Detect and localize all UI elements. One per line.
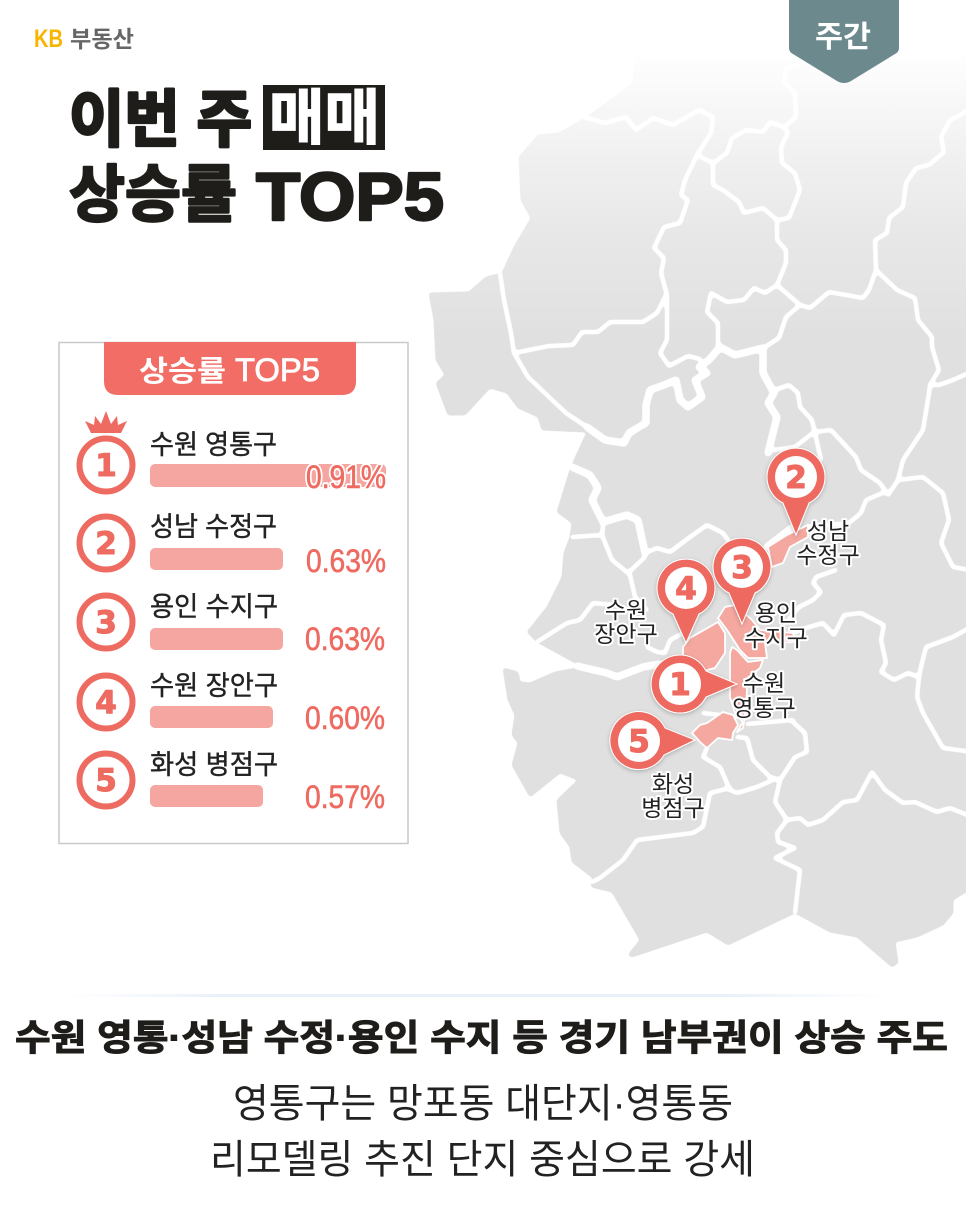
map label: 수원 영통구: [732, 670, 796, 721]
row 1: 0.91%: [306, 459, 386, 495]
tag: 주간: [789, 0, 899, 83]
map label: 화성 병점구: 화성: [652, 771, 694, 797]
row 2: 성남 수정구: [150, 512, 277, 542]
map label: 용인 수지구: 수지구: [744, 625, 808, 651]
map label: 성남 수정구: 수정구: [796, 542, 860, 568]
title: TOP5: [256, 159, 444, 235]
map label: 성남 수정구: [796, 518, 860, 568]
map label: 화성 병점구: 병점구: [641, 795, 705, 821]
headline: 수원 영통·성남 수정·용인 수지 등 경기 남부권이 상승 주도: [15, 1017, 948, 1058]
row 5: 5: [95, 763, 117, 799]
row 1: 1: [95, 448, 117, 484]
row 2: 0.63%: [306, 543, 386, 579]
pin 2: [767, 448, 825, 535]
map label: 성남 수정구: 성남: [807, 518, 849, 544]
logo: KB 부동산: KB: [34, 25, 63, 53]
pin 1: 1: [669, 667, 691, 703]
pin 4: [657, 559, 715, 643]
row 4: [80, 671, 385, 736]
map label: 수원 장안구: 장안구: [594, 621, 658, 647]
logo: KB 부동산: 부동산: [70, 26, 134, 52]
pin 4: 4: [675, 571, 697, 607]
row 3: [80, 592, 385, 657]
row 4: 수원 장안구: [150, 671, 278, 701]
pin 5: 5: [628, 724, 650, 760]
row 1: 0.91%: [306, 459, 386, 495]
icon: crown: [85, 411, 127, 433]
map of Gyeonggi region: [429, 40, 966, 967]
row 2: [80, 512, 386, 579]
row 3: 0.63%: [305, 621, 385, 657]
row 5: 0.57%: [305, 779, 385, 815]
row 4: 0.60%: [305, 700, 385, 736]
title: 매매: [269, 85, 380, 152]
row 5: [80, 750, 385, 815]
row 3: 3: [95, 605, 117, 641]
map silhouette: [429, 40, 966, 967]
row 2: 2: [95, 526, 117, 562]
map label: 수원 영통구: 영통구: [732, 695, 796, 721]
tag: 주간: 주간: [815, 21, 871, 54]
row 5: 화성 병점구: [150, 750, 278, 780]
district boundaries: [500, 65, 966, 913]
row 3: 용인 수지구: [150, 592, 278, 622]
panel header title: 상승률: [139, 355, 226, 388]
row 1: 수원 영통구: [150, 430, 277, 460]
title highlight box: [263, 85, 385, 150]
highlighted districts: [683, 525, 808, 748]
title: [69, 85, 444, 235]
pin 1: [651, 655, 737, 713]
map label: 수원 장안구: 수원: [605, 597, 647, 623]
row 4: 4: [95, 685, 117, 721]
pin 3: [713, 538, 771, 624]
title: 상승률: [69, 161, 237, 230]
panel header title: TOP5: [235, 352, 320, 388]
panel header title: [139, 352, 320, 388]
logo: KB 부동산: [34, 25, 134, 53]
map label: 수원 영통구: 수원: [743, 670, 785, 696]
pin 3: 3: [731, 550, 753, 586]
panel header: [104, 342, 356, 395]
panel: rise rate TOP5: [59, 342, 408, 844]
map label: 용인 수지구: 용인: [755, 600, 797, 626]
map label: 화성 병점구: [641, 771, 705, 821]
row 1: [80, 430, 386, 495]
map label: 용인 수지구: [744, 600, 808, 651]
pin 2: 2: [785, 460, 807, 496]
title: 이번 주: [69, 86, 252, 155]
map label: 수원 장안구: [594, 597, 658, 647]
subtext line 2: 리모델링 추진 단지 중심으로 강세: [210, 1138, 755, 1182]
pin 5: [610, 712, 695, 770]
subtext line 1: 영통구는 망포동 대단지·영통동: [233, 1082, 733, 1126]
